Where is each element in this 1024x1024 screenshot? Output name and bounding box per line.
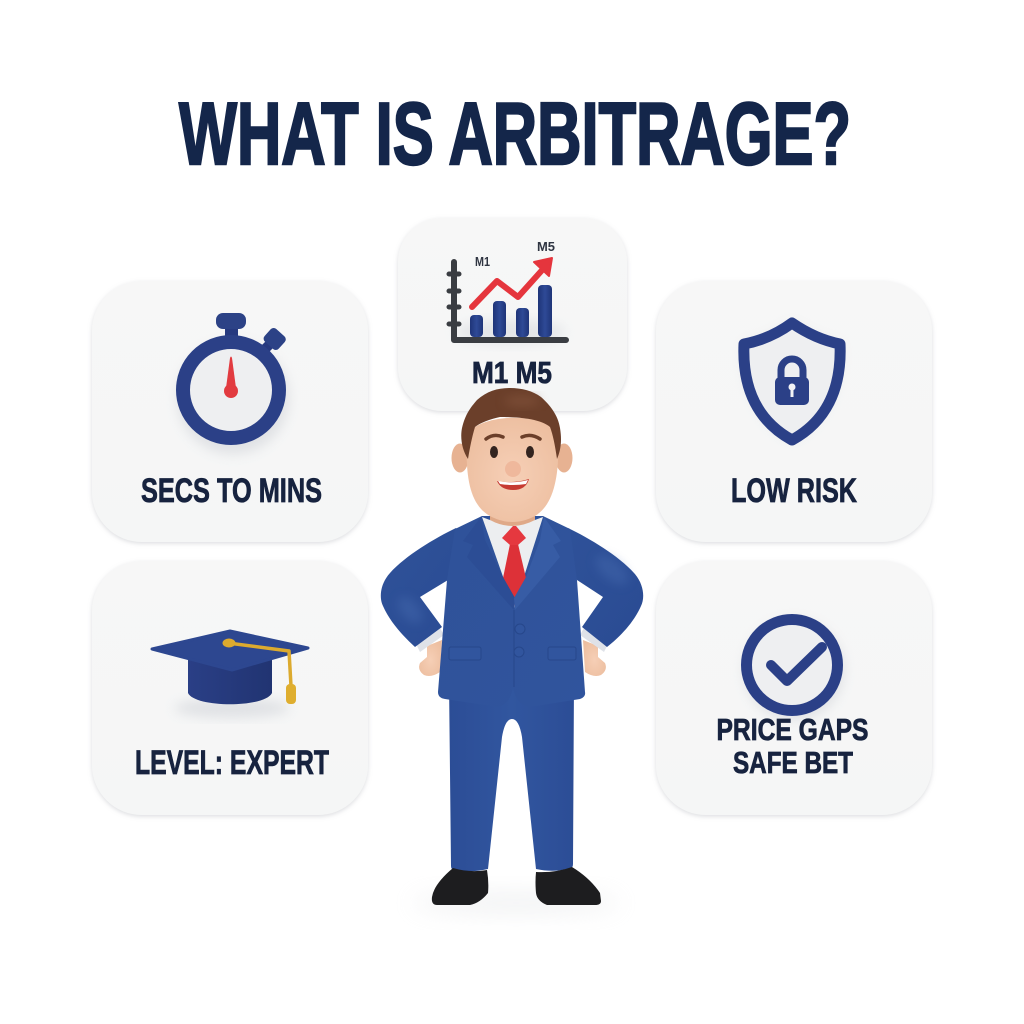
label: low risk: LOW RISK (731, 472, 857, 510)
label: price gaps safe bet (716, 712, 868, 780)
panel: secs to mins (92, 281, 368, 542)
hair (461, 388, 561, 459)
icon: graduation cap (152, 631, 308, 718)
figure: businessman in blue suit (381, 388, 643, 912)
label: secs to mins: SECS TO MINS (141, 472, 322, 510)
buttons (514, 624, 525, 657)
label: price gaps safe bet: SAFE BET (733, 745, 853, 780)
icon: bar chart with rising arrow: M1 (475, 254, 490, 269)
icon: shield with padlock (744, 323, 840, 440)
left lapel (463, 517, 515, 610)
right shoe (536, 867, 601, 905)
nose (505, 461, 521, 477)
necktie (502, 526, 526, 606)
right cuff (580, 628, 608, 652)
left pocket flap (449, 647, 481, 660)
left cuff (416, 628, 444, 652)
shirt (482, 517, 543, 608)
right sleeve (554, 528, 643, 647)
label: level expert: LEVEL: EXPERT (135, 744, 329, 782)
jacket (438, 516, 585, 707)
right pocket flap (548, 647, 576, 660)
panel: price gaps safe bet (656, 561, 932, 815)
icon: stopwatch (177, 313, 289, 454)
eyes (490, 446, 534, 458)
panel: low risk (656, 281, 932, 542)
icon: bar chart with rising arrow (449, 239, 566, 344)
right hand (583, 640, 606, 676)
head (452, 388, 572, 526)
trousers (449, 680, 574, 871)
icon: bar chart with rising arrow: M5 (537, 239, 555, 254)
label: price gaps safe bet: PRICE GAPS (716, 712, 868, 747)
panel: chart M1 M5 (398, 218, 627, 411)
left sleeve (381, 528, 470, 647)
sleeve highlights (393, 549, 634, 628)
hair highlight (504, 396, 540, 406)
jacket front seam (513, 610, 515, 687)
label: M1 M5: M1 M5 (472, 355, 552, 390)
right lapel (514, 517, 561, 610)
left shoe (432, 868, 488, 905)
left hand (419, 640, 442, 676)
eyebrows (486, 435, 540, 439)
smile (497, 479, 529, 490)
panel: level expert (92, 561, 368, 815)
icon: check mark badge (744, 620, 844, 720)
